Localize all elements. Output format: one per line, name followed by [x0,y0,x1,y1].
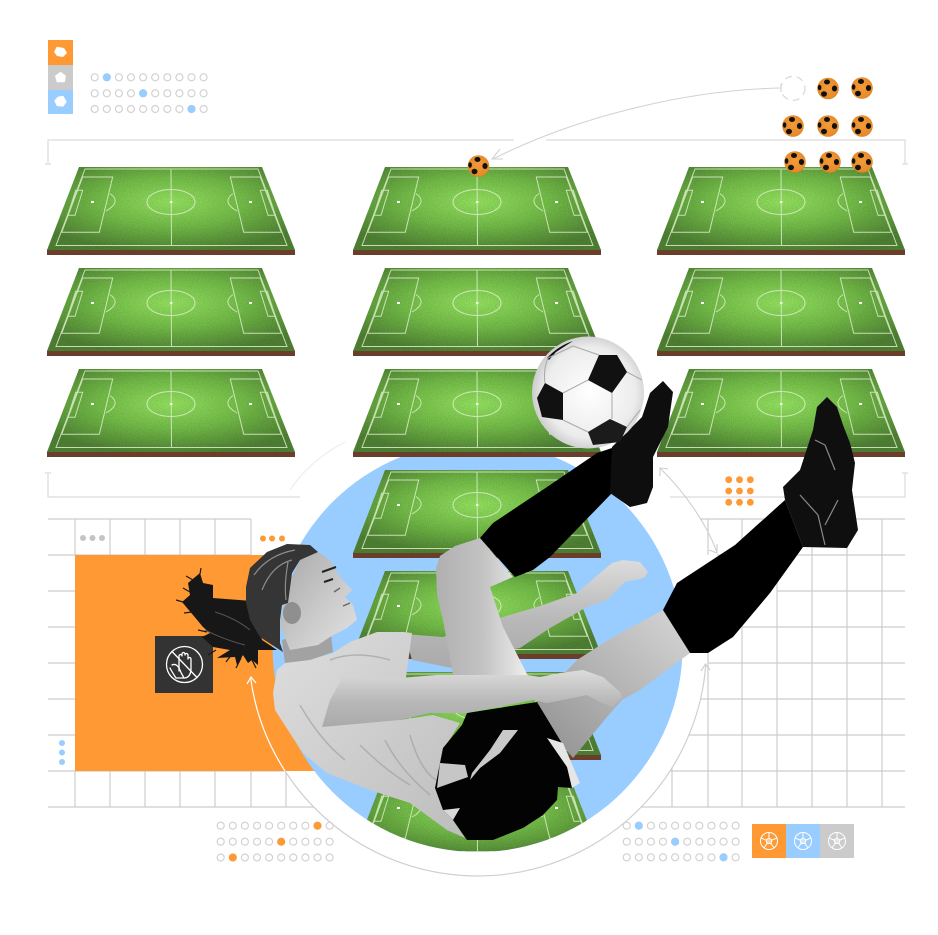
eye and brow [322,567,336,582]
empty ball slot [781,76,805,100]
boot one [610,381,673,507]
curved arrow around circle [247,664,710,876]
player [176,336,858,840]
torso shirt [273,632,465,838]
pitches: left column [47,167,295,457]
lower leg to second sock [537,610,690,758]
face [280,552,357,650]
orange panel [75,555,335,771]
faint arc: upper left of circle [290,442,345,490]
sock two [663,500,803,653]
small blue dots [59,740,65,765]
white mask around circle [248,418,706,876]
shirt folds [300,655,436,795]
dot matrix: bottom right [623,822,739,861]
pitches: lower centre, clipped by circle [367,672,601,852]
soccer ball [532,336,644,448]
orange balls grid [782,77,873,173]
nose and mouth shadow [334,588,350,606]
near arm and hand [322,670,622,727]
legend: pentagon colour squares [48,40,73,114]
double-headed arrow near boot [660,468,717,553]
shorts [435,702,580,840]
icon: no hands [155,636,213,693]
small orange dots [260,536,285,542]
dot matrix: bottom left [217,822,333,862]
hair [246,544,318,652]
neck [282,625,333,664]
sock one [480,448,612,577]
ball arrow from empty slot to pitch [492,84,781,159]
orange dot square [725,476,754,506]
small grey dots [80,535,105,541]
hair highlights [254,550,295,600]
legend: ball colour squares [752,824,854,858]
ear [283,602,301,624]
pitches: right column [657,167,905,457]
pitches: centre column [353,167,601,659]
blue circle [272,442,682,852]
raised thigh [436,538,528,676]
bracket: below pitches [45,473,908,497]
ponytail [176,568,277,668]
bracket: above pitches [45,140,908,164]
far arm [405,560,648,668]
boot two [783,397,858,548]
dot matrix: top left [91,73,207,113]
grid background [48,519,905,807]
orange ball on pitch [468,155,489,177]
